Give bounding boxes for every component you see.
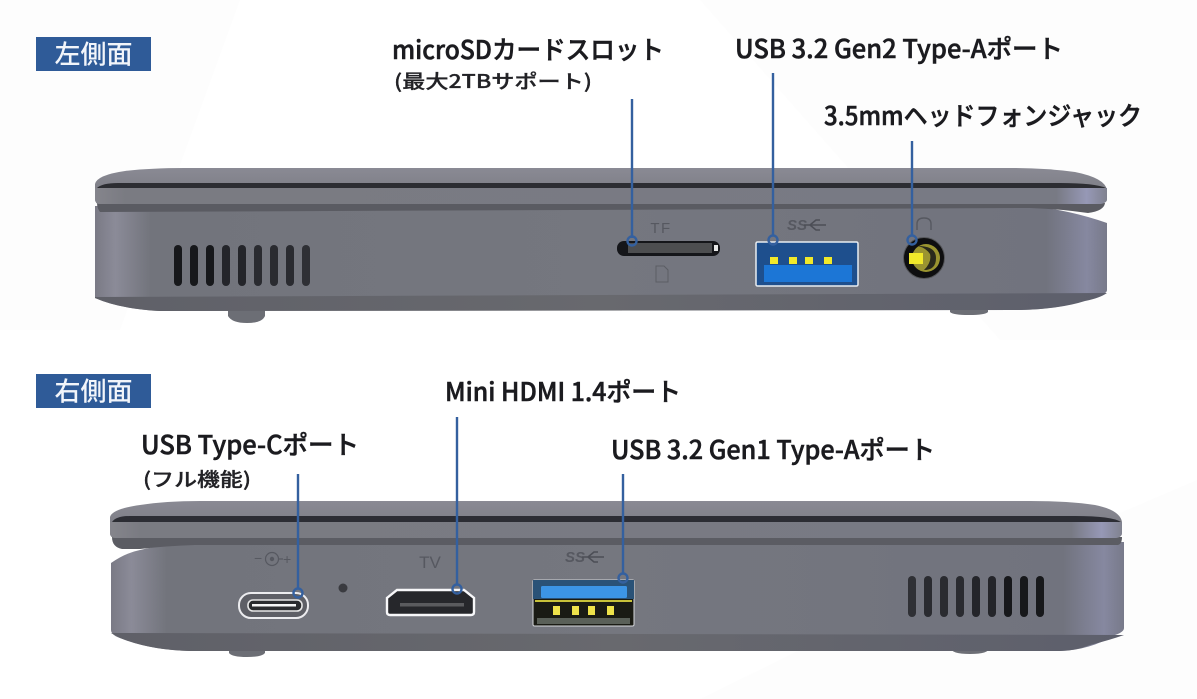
vents left: [174, 245, 310, 286]
DC mark: +: [283, 551, 291, 567]
USB Type-C port: [239, 593, 308, 618]
callout: USB Type-C: USB Type-Cポート: [141, 425, 359, 462]
foot right: [950, 307, 988, 315]
callout: Mini HDMI: Mini HDMI 1.4ポート: [445, 372, 681, 409]
callout: USB 3.2 Gen2: [735, 29, 1063, 244]
LED: [338, 584, 348, 592]
DC mark: −: [254, 550, 262, 566]
TF mark: TF: [650, 220, 672, 237]
foot right: [951, 648, 989, 654]
body: [111, 542, 1124, 651]
callout: Mini HDMI: [445, 372, 681, 594]
lid lower band: [95, 188, 1107, 204]
lower chamfer: [111, 633, 1124, 651]
black stripe: [112, 516, 1121, 522]
USB 3.2 Gen2 port: [756, 242, 858, 286]
foot left: [229, 648, 265, 657]
callout: microSD: (最大2TBサポート): [394, 67, 592, 94]
callout: headphone jack: 3.5mmヘッドフォンジャック: [824, 96, 1142, 133]
badge: right side: [36, 372, 151, 408]
microSD slot: [617, 241, 720, 256]
callout: microSD: microSDカードスロット: [392, 30, 664, 67]
badge: left side: 左側面: [54, 34, 133, 72]
lid: [95, 168, 1107, 204]
badge: left side: [36, 34, 151, 72]
lid: [110, 501, 1122, 538]
SS USB mark left: [787, 217, 826, 234]
Mini HDMI port: [387, 590, 474, 615]
callout: USB 3.2 Gen1: [611, 430, 935, 582]
lid lower band: [110, 522, 1122, 538]
lower chamfer: [95, 293, 1107, 311]
vents right: [908, 576, 1044, 617]
gap under lid: [112, 537, 1122, 549]
laptop: left side view: [95, 168, 1107, 323]
TV mark: TV: [419, 553, 442, 572]
SS USB mark right: [565, 549, 604, 566]
USB 3.2 Gen1 port: [533, 580, 634, 626]
headphone mark: [917, 218, 931, 230]
gap under lid: [97, 203, 1105, 213]
callout: USB 3.2 Gen2: USB 3.2 Gen2 Type-Aポート: [735, 29, 1063, 66]
callout: USB Type-C: (フル機能): [143, 465, 251, 492]
black stripe: [97, 183, 1106, 188]
callout: headphone jack: [824, 96, 1142, 244]
SS USB mark left: SS: [787, 217, 807, 234]
badge: right side: 右側面: [54, 372, 133, 408]
audio jack: [904, 238, 944, 278]
SS USB mark right: SS: [565, 549, 585, 566]
callout: USB 3.2 Gen1: USB 3.2 Gen1 Type-Aポート: [611, 430, 935, 467]
callout: USB Type-C: [141, 425, 359, 598]
laptop: right side view: [110, 501, 1124, 657]
body: [95, 206, 1107, 311]
callout: microSD: [392, 30, 664, 246]
foot left: [228, 308, 265, 323]
DC mark: [254, 550, 291, 567]
microSD icon: [656, 266, 668, 282]
